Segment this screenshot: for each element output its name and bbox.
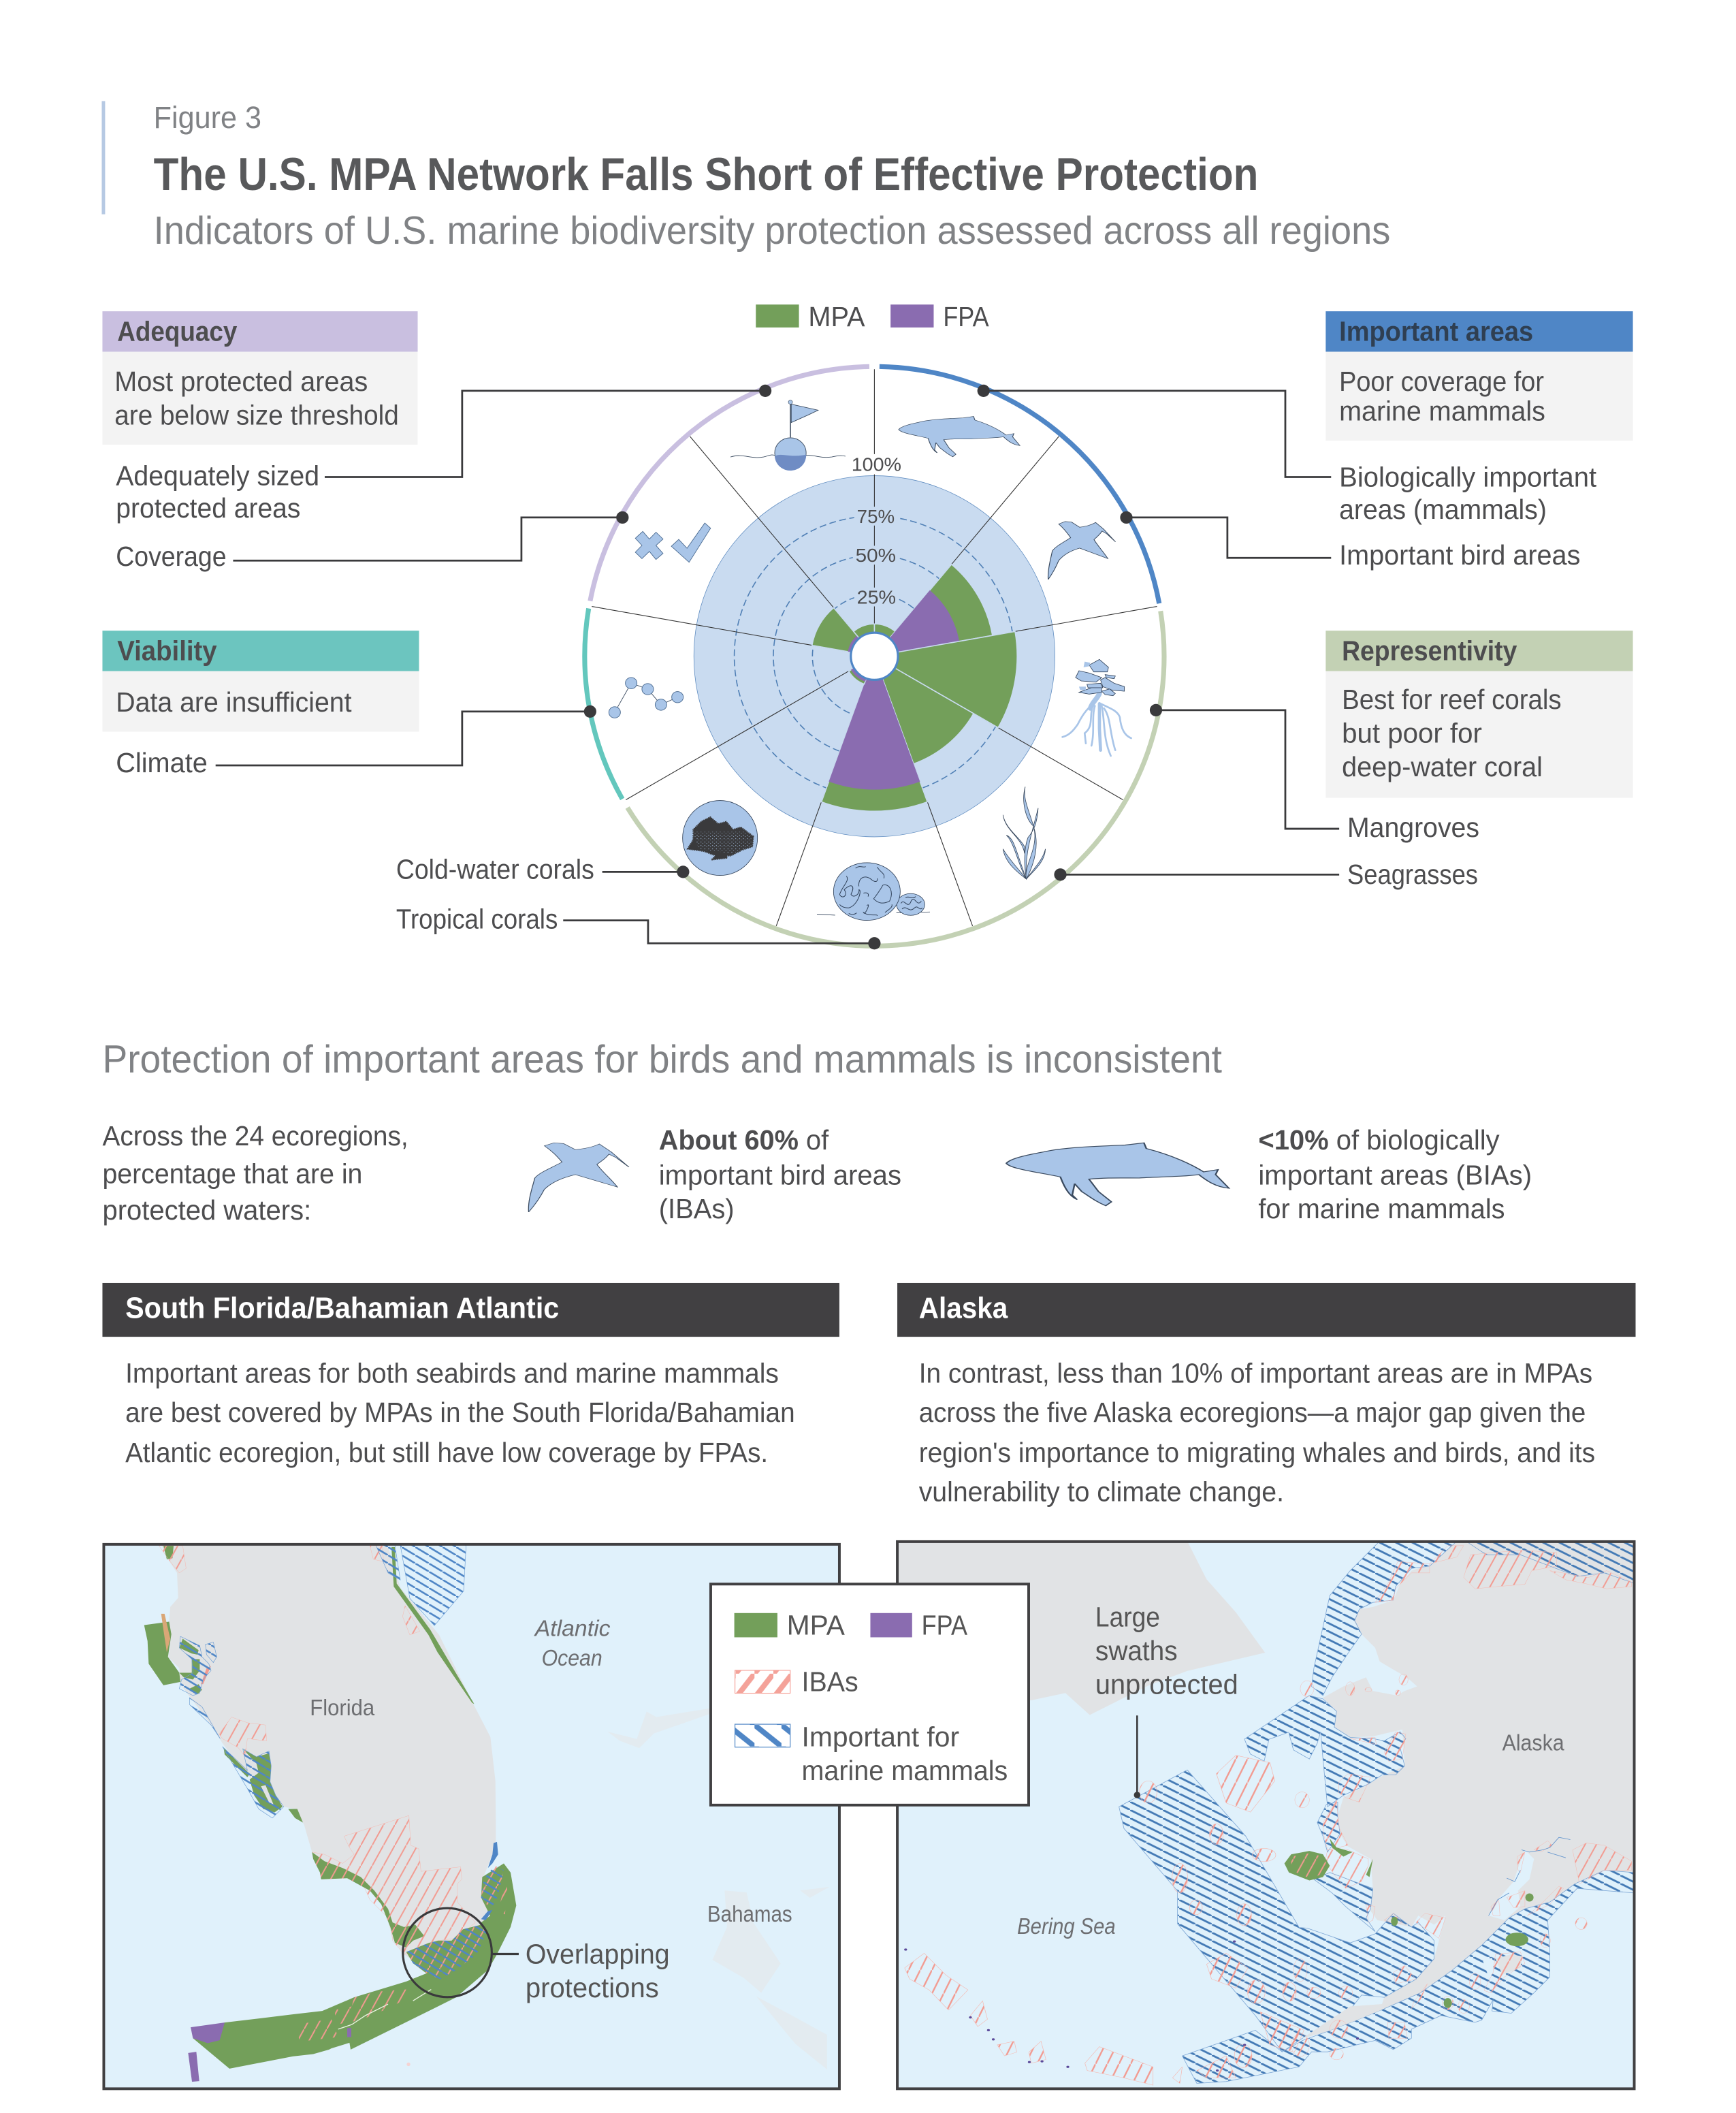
text: alaska: across the five Alaska ecoregions—a major gap given the [919,1397,1586,1428]
figure label: Figure 3 [154,100,261,135]
title: The U.S. MPA Network Falls Short of Effective Protection [154,149,1258,200]
map: florida land [159,1539,496,1973]
header: alaska [897,1283,1636,1337]
callout: overlapping protections: protections [526,1972,659,2003]
panel: representivity: Representivity [1342,635,1517,667]
stat: biologically important areas: <10% of biologically [1258,1124,1500,1156]
map: florida detail [144,1539,516,2082]
map: kenai estuaries [1489,1837,1571,1916]
icon: whale [899,417,1020,457]
connector: coverage [233,511,628,560]
map: nunivak bird overlay [1291,1854,1328,1878]
text: across ecoregions: Across the 24 ecoregions, [102,1120,408,1151]
panel: viability: Viability [117,635,217,667]
label: climate: Climate [116,747,208,778]
chart legend: FPA [943,301,989,332]
text: south florida: are best covered by MPAs in the South Florida/Bahamian [125,1397,795,1428]
icon: large bird [528,1143,629,1212]
connector: cold-water corals [602,865,689,878]
sector lines [592,369,1157,926]
map frame [897,1542,1635,2088]
map labels: Atlantic [534,1616,611,1641]
text: south florida [125,1357,795,1468]
text: across ecoregions: protected waters: [102,1194,311,1226]
percent labels: 25% [857,587,896,608]
panel: viability: Data are insufficient [116,686,352,718]
panel: adequacy [102,311,418,445]
label: mangroves: Mangroves [1347,812,1479,843]
header: south florida: South Florida/Bahamian Atlantic [125,1292,559,1324]
stat: important bird areas: (IBAs) [659,1193,735,1224]
map: kodiak land over hatch [1302,1954,1523,2038]
map: gulf coast protected areas [144,1546,475,1823]
stat: important bird areas: important bird areas [659,1160,901,1191]
map: important bird areas [1291,1546,1632,2060]
subtitle: Indicators of U.S. marine biodiversity protection assessed across all regions [154,209,1390,253]
map: gulf coast bird areas [159,1546,420,1757]
header: south florida [102,1283,839,1337]
panel: representivity: Best for reef corals [1342,684,1562,715]
map legend [711,1584,1029,1805]
center hole [851,633,898,680]
panel: important areas: Poor coverage for [1339,366,1544,397]
map: keys and everglades [188,1815,516,2082]
map frame [103,1544,839,2088]
connector: biologically important areas [978,385,1331,477]
stat: important bird areas: About 60% of [659,1124,829,1156]
icon: mangrove [1063,659,1131,756]
chart legend [756,301,989,332]
map: bering and aleutian overlays [904,1755,1359,2085]
wedges [781,565,1031,836]
label: biologically important areas: Biologically important [1339,461,1596,492]
map: southwest coast protected [312,1852,424,1948]
callout: large swaths unprotected: swaths [1095,1635,1178,1666]
connector: seagrasses [1054,868,1339,880]
stat: biologically important areas: important areas (BIAs) [1258,1160,1532,1191]
callout: overlapping protections: Overlapping [526,1938,670,1969]
stat: biologically important areas [1258,1124,1532,1224]
icon: bird [1048,522,1116,579]
text: south florida: Important areas for both seabirds and marine mammals [125,1357,779,1388]
label: adequately sized protected areas [116,460,319,524]
outer ring: important areas [880,366,1159,603]
callout: large swaths unprotected: unprotected [1095,1669,1238,1700]
label: biologically important areas: areas (mammals) [1339,494,1547,525]
disk 100 percent [694,476,1055,837]
map: keys islands [338,1990,431,2029]
percent labels [852,454,901,608]
dashed rings [735,516,1014,797]
icon: buoy [730,400,846,471]
connector: adequately sized [325,385,771,477]
connector: tropical corals [563,921,881,949]
map: south florida: Florida [310,1696,374,1721]
map: west keys fully protected [188,2022,351,2082]
polar chart [585,366,1164,946]
map: marine protected areas [1285,1839,1534,2008]
panel: important areas: marine mammals [1339,395,1545,426]
chart legend: MPA [808,301,865,332]
panel: adequacy: are below size threshold [114,399,399,430]
percent labels: 50% [856,545,896,566]
panel: adequacy: Adequacy [117,316,238,347]
map: russia land [897,1541,1265,1715]
panel: important areas [1325,311,1633,441]
map: kodiak island [1496,1954,1523,1975]
outer ring: adequacy [590,366,869,601]
callout: large swaths unprotected [1095,1602,1238,1798]
panel: representivity: but poor for [1342,717,1482,748]
map legend: marine mammals [802,1755,1008,1786]
text: across ecoregions [102,1120,408,1226]
map: alaska detail [1119,1541,1634,2083]
section heading: Protection of important areas for birds and mammals is inconsistent [102,1038,1222,1081]
map legend: MPA [787,1609,845,1640]
map legend: Important for [802,1721,959,1753]
stat: important bird areas [659,1124,901,1224]
header accent bar [101,101,105,215]
outer ring: representivity [628,611,1164,946]
icon: large whale [1006,1143,1229,1206]
text: alaska: vulnerability to climate change. [919,1476,1284,1508]
panel: adequacy: Most protected areas [114,366,368,397]
map: south florida: Bahamas [707,1902,792,1927]
map: overlap area [406,1924,481,1977]
connector: climate [216,705,596,765]
label: coverage: Coverage [116,541,227,572]
panel: representivity: deep-water coral [1342,751,1543,782]
label: biologically important areas [1339,461,1596,525]
callout: large swaths unprotected: Large [1095,1602,1160,1633]
map: alaska: Bering Sea [1017,1914,1116,1939]
text: alaska [919,1357,1595,1508]
map legend: FPA [922,1609,967,1640]
stat: biologically important areas: for marine mammals [1258,1193,1505,1224]
map: fully protected dots [904,1941,1359,2071]
map: reef tract protected area [193,1864,516,2069]
map: gulf coast mammal areas [179,1545,466,1818]
panel: representivity [1325,631,1633,798]
map: alaska [897,1541,1635,2088]
callout: overlapping protections [403,1908,670,2003]
map: keys bird areas [296,1875,507,2041]
panel: viability [102,631,419,732]
map: important for marine mammals [1119,1541,1634,2083]
map: coastal blue strips [481,1842,498,1920]
connector: mangroves [1150,704,1339,829]
map: bahamas land [607,1708,829,2069]
map: cook inlet [1489,1850,1534,1920]
map: alaska land [1302,1541,1634,2038]
icon: cold-water coral [683,801,758,876]
map: western bird areas [905,1755,1304,2085]
map: south florida [103,1539,839,2088]
map legend: IBAs [802,1666,858,1698]
percent labels: 100% [852,454,901,475]
label: seagrasses: Seagrasses [1347,859,1478,890]
percent labels: 75% [857,506,895,527]
icon: connected dots [609,678,684,718]
outer ring: viability [585,608,622,799]
text: across ecoregions: percentage that are in [102,1158,362,1190]
icon: cross and check [635,523,711,562]
label: adequately sized protected areas: Adequately sized [116,460,319,491]
label: cold-water corals: Cold-water corals [396,853,594,885]
icon: tropical coral [817,863,930,921]
map: everglades bird area [312,1815,475,1954]
connector: important bird areas [1120,511,1331,558]
map labels: Alaska [1502,1731,1564,1756]
header: alaska: Alaska [919,1292,1008,1324]
label: adequately sized protected areas: protected areas [116,492,300,524]
text: alaska: region's importance to migrating whales and birds, and its [919,1437,1595,1468]
text: south florida: Atlantic ecoregion, but still have low coverage by FPAs. [125,1437,768,1468]
label: tropical corals: Tropical corals [396,903,558,934]
icon: seagrass [1003,787,1046,879]
text: alaska: In contrast, less than 10% of important areas are in MPAs [919,1357,1592,1388]
map: biscayne overlap [481,1866,503,1905]
label: important bird areas: Important bird areas [1339,539,1580,571]
map: south florida: Ocean [542,1646,602,1671]
panel: important areas: Important areas [1339,316,1533,347]
